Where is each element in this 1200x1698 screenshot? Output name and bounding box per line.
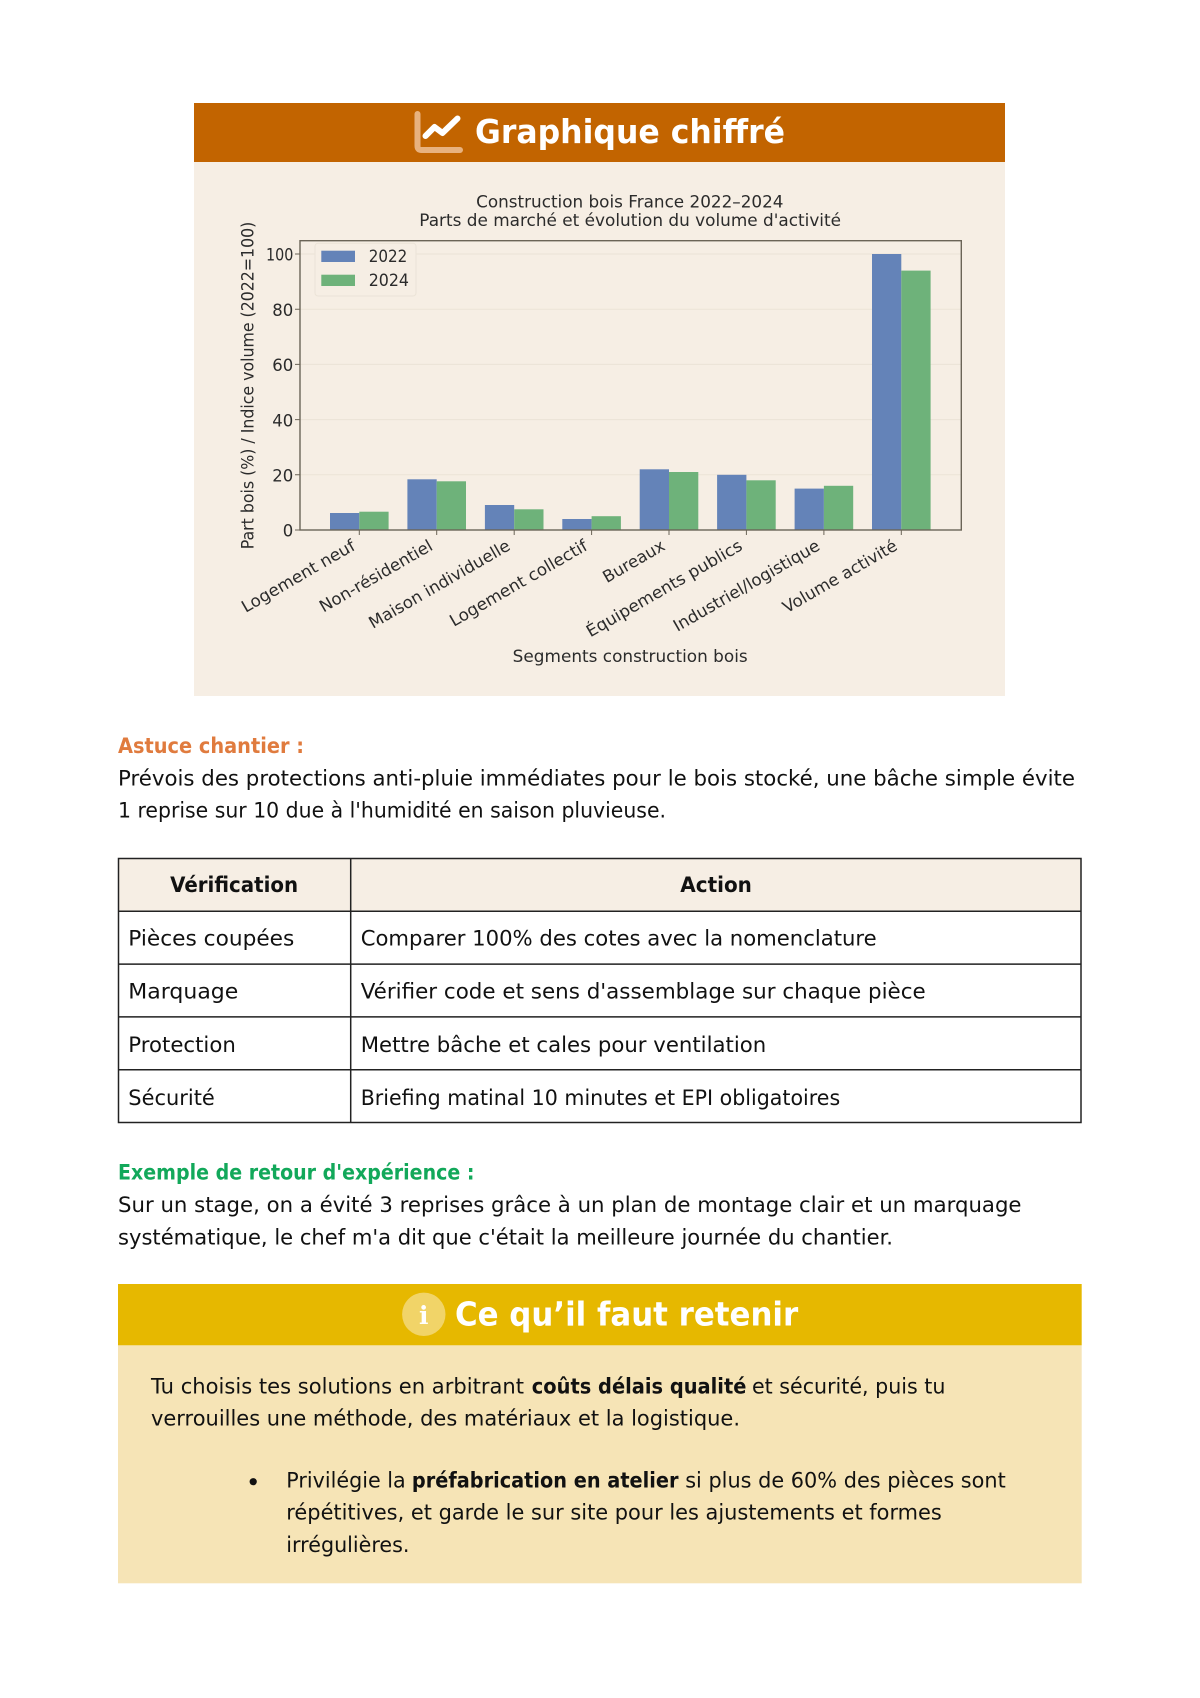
legend <box>315 243 416 296</box>
x axis title: Segments construction bois <box>513 647 748 666</box>
y axis tick labels: 40 <box>272 411 293 430</box>
bullet point: si plus de 60% des pièces sont <box>685 1468 1006 1493</box>
panel: ce qu'il faut retenir <box>118 1284 1082 1583</box>
header: ce qu'il faut retenir <box>118 1284 1082 1345</box>
y axis tick labels <box>266 246 293 541</box>
bar chart <box>238 222 961 666</box>
row: pièces coupées: Comparer 100% des cotes avec la nomenclature <box>361 926 877 952</box>
y axis tick labels: 20 <box>272 467 293 486</box>
x axis category labels: Bureaux <box>599 536 668 587</box>
table header: Action <box>680 873 752 898</box>
text block: exemple de retour d'expérience <box>118 1161 1022 1250</box>
row: marquage: Vérifier code et sens d'assemblage sur chaque pièce <box>361 979 926 1004</box>
icon: information <box>402 1293 445 1336</box>
legend: 2024 <box>369 271 409 290</box>
text block: astuce chantier: Prévois des protections anti-pluie immédiates pour le bois stocké, une bâche simple évite <box>118 767 1075 792</box>
row: pièces coupées: Pièces coupées <box>128 926 294 952</box>
bullet point: irrégulières. <box>286 1533 410 1558</box>
bullet point <box>250 1468 1006 1558</box>
x axis category labels <box>238 535 900 641</box>
legend: 2022 <box>369 247 407 266</box>
row: protection: Protection <box>128 1033 236 1058</box>
y axis title: Part bois (%) / Indice volume (2022=100) <box>238 222 257 549</box>
summary paragraph: Tu choisis tes solutions en arbitrant <box>150 1374 524 1399</box>
text block: exemple de retour d'expérience: Exemple de retour d'expérience : <box>118 1161 474 1186</box>
bullet point: répétitives, et garde le sur site pour les ajustements et formes <box>286 1501 942 1526</box>
bullet point: Privilégie la <box>286 1468 406 1493</box>
x axis category labels: Logement neuf <box>238 535 360 616</box>
row: protection <box>128 1033 766 1058</box>
text block: exemple de retour d'expérience: Sur un stage, on a évité 3 reprises grâce à un plan de montage clair et un marquage <box>118 1193 1022 1218</box>
row: pièces coupées <box>128 926 877 952</box>
x axis category labels: Équipements publics <box>583 536 746 641</box>
icon: line chart <box>418 114 460 150</box>
bars 2022 <box>330 254 901 530</box>
table header <box>170 873 752 898</box>
y axis tick labels: 80 <box>272 301 293 320</box>
row: sécurité: Sécurité <box>128 1086 215 1111</box>
chart title: Parts de marché et évolution du volume d'activité <box>419 211 841 230</box>
y axis tick labels: 60 <box>272 356 293 375</box>
chart title: Construction bois France 2022–2024 <box>476 192 784 212</box>
x axis category labels: Maison individuelle <box>365 536 513 632</box>
icon: information: i <box>419 1301 429 1330</box>
table header: Vérification <box>170 873 298 898</box>
panel: graphique chiffré <box>194 103 1005 696</box>
x axis category labels: Logement collectif <box>446 535 592 630</box>
x axis category labels: Industriel/logistique <box>670 536 823 635</box>
text block: astuce chantier: 1 reprise sur 10 due à l'humidité en saison pluvieuse. <box>118 798 666 824</box>
x axis category labels: Non-résidentiel <box>316 536 436 616</box>
text block: exemple de retour d'expérience: systématique, le chef m'a dit que c'était la meilleure journée du chantier. <box>118 1225 893 1250</box>
row: sécurité <box>128 1086 840 1111</box>
summary paragraph: et sécurité, puis tu <box>752 1374 945 1399</box>
bars 2024 <box>359 271 931 530</box>
summary paragraph: coûts délais qualité <box>532 1374 746 1399</box>
header: graphique chiffré <box>194 103 1005 162</box>
summary paragraph: verrouilles une méthode, des matériaux et la logistique. <box>151 1407 740 1432</box>
heading: graphique chiffré: Graphique chiffré <box>475 112 785 151</box>
chart title <box>419 192 841 230</box>
bullet point: préfabrication en atelier <box>412 1468 679 1493</box>
table: vérification et action <box>118 858 1081 1122</box>
axes frame <box>295 241 961 535</box>
text block: astuce chantier <box>118 734 1075 824</box>
text block: astuce chantier: Astuce chantier : <box>118 734 304 759</box>
row: protection: Mettre bâche et cales pour ventilation <box>361 1033 766 1058</box>
x axis category labels: Volume activité <box>779 536 900 617</box>
heading: ce qu'il faut retenir: Ce qu’il faut retenir <box>455 1295 799 1334</box>
summary paragraph <box>150 1374 945 1432</box>
y axis tick labels: 0 <box>283 522 293 541</box>
row: marquage: Marquage <box>128 979 238 1004</box>
row: sécurité: Briefing matinal 10 minutes et EPI obligatoires <box>361 1086 840 1111</box>
y axis tick labels: 100 <box>266 246 293 265</box>
